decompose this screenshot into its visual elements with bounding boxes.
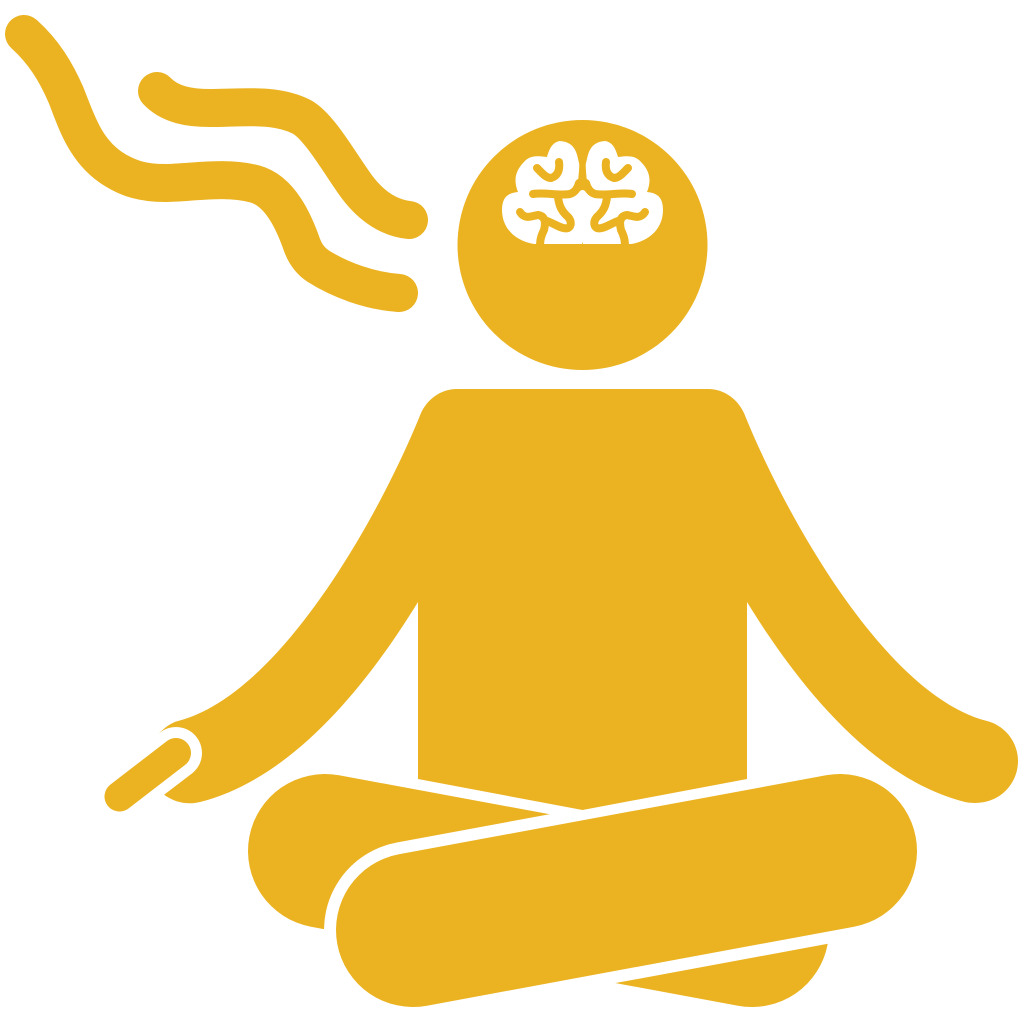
lower smoke wave bbox=[24, 34, 399, 293]
icon: incense stick in hand bbox=[119, 753, 176, 796]
icon: head with brain bbox=[458, 120, 708, 370]
upper smoke wave bbox=[157, 91, 409, 220]
front leg bbox=[413, 851, 840, 930]
torso and arms bbox=[158, 389, 1018, 810]
brain left hemisphere bbox=[502, 141, 583, 247]
brain right hemisphere bbox=[582, 141, 663, 247]
back leg bbox=[325, 851, 752, 930]
head bbox=[458, 120, 708, 370]
icon: smoke waves bbox=[24, 34, 409, 293]
brain bbox=[502, 141, 663, 247]
